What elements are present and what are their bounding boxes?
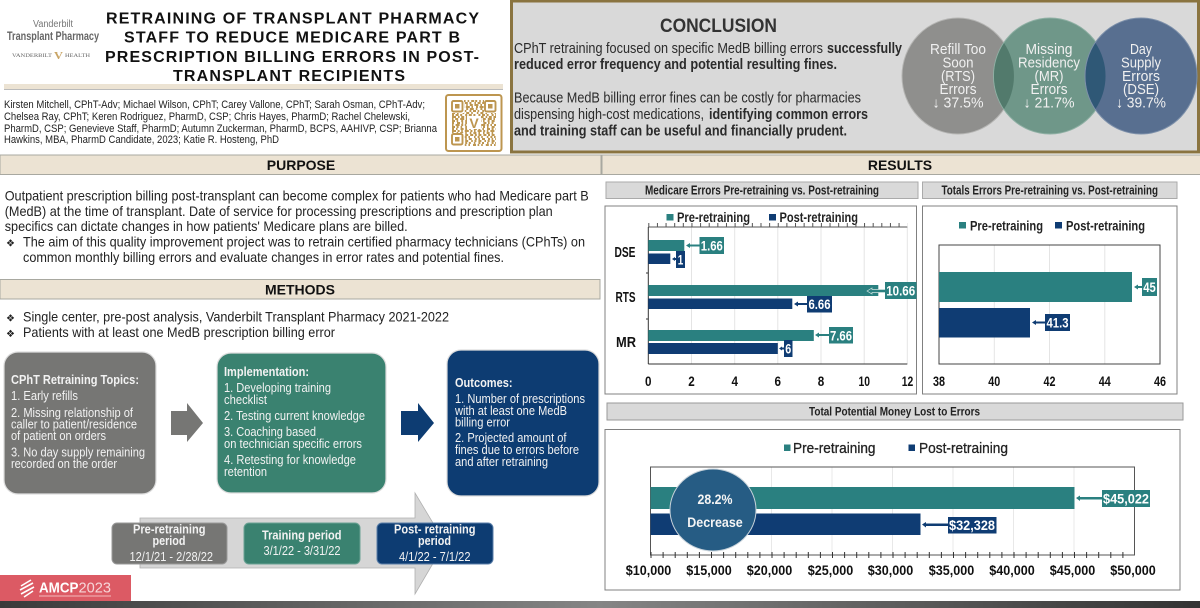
panel: outcomes: and after retraining bbox=[455, 455, 548, 469]
data labels: 1 bbox=[678, 252, 683, 268]
panel: CPhT retraining topics: 3. No day supply remaining bbox=[11, 446, 145, 460]
timeline: training period: Training period bbox=[262, 528, 342, 542]
panel: implementation: 4. Retesting for knowledge bbox=[224, 453, 356, 467]
panel: CPhT retraining topics bbox=[4, 352, 156, 494]
axis labels bbox=[933, 373, 1166, 389]
data labels: $45,022 bbox=[1103, 490, 1149, 506]
data labels bbox=[922, 490, 1150, 534]
authors: Chelsea Ray, CPhT; Keren Rodriguez, PharmD, CSP; Chris Hayes, PharmD; Rachel Chelewski, bbox=[4, 111, 410, 123]
axis labels: 10 bbox=[858, 373, 870, 389]
footer bar bbox=[0, 601, 1200, 608]
axis labels: $25,000 bbox=[808, 562, 853, 578]
authors: Kirsten Mitchell, CPhT-Adv; Michael Wilson, CPhT; Carey Vallone, CPhT; Sarah Osman, CPhT-Adv; bbox=[4, 99, 425, 111]
legend bbox=[666, 210, 858, 225]
logo: AMCP 2023: 2023 bbox=[78, 580, 111, 596]
arrow: timeline bbox=[140, 493, 445, 594]
text block: purpose: common monthly billing errors and evaluate changes in error rates and potential fines. bbox=[23, 249, 504, 265]
heading: methods: METHODS bbox=[265, 282, 335, 298]
category labels: DSE bbox=[614, 244, 636, 261]
panel: implementation bbox=[217, 353, 386, 493]
icon: QR code bbox=[446, 95, 502, 151]
icon: QR code: V bbox=[469, 115, 479, 131]
axis labels: $20,000 bbox=[747, 562, 792, 578]
text block: conclusion body: successfully bbox=[827, 41, 902, 57]
panel: outcomes bbox=[447, 350, 599, 496]
heading: results bbox=[602, 155, 1200, 174]
venn: error reductions: ↓ 37.5% bbox=[932, 96, 984, 112]
panel: conclusion bbox=[512, 1, 1198, 152]
timeline: post-retraining period bbox=[377, 522, 493, 564]
text block: conclusion body: and training staff can be useful and financially prudent. bbox=[514, 124, 847, 140]
heading: purpose bbox=[0, 155, 601, 174]
callout: 28.2% decrease bbox=[670, 469, 756, 551]
authors: Hawkins, MBA, PharmD Candidate, 2023; Katie R. Hosteng, PhD bbox=[4, 134, 279, 146]
logo: Vanderbilt Transplant Pharmacy: HEALTH bbox=[65, 53, 90, 59]
timeline: pre-retraining period: period bbox=[152, 534, 186, 548]
axis labels bbox=[626, 562, 1156, 578]
venn: error reductions: Missing bbox=[1026, 42, 1072, 58]
panel: outcomes: 2. Projected amount of bbox=[455, 431, 567, 445]
text block: purpose: specifics can dictate changes in how patients' Medicare plans are billed. bbox=[5, 218, 408, 234]
panel: CPhT retraining topics: caller to patient/residence bbox=[11, 418, 137, 432]
panel: implementation: on technician specific errors bbox=[224, 437, 362, 451]
venn: error reductions: Errors bbox=[940, 82, 976, 98]
text block: methods bullets: ❖ bbox=[6, 329, 15, 340]
timeline: training period: 3/1/22 - 3/31/22 bbox=[264, 544, 341, 558]
venn: error reductions: (MR) bbox=[1034, 69, 1064, 85]
text block: methods bullets: Single center, pre-post analysis, Vanderbilt Transplant Pharmacy 2021-2022 bbox=[23, 308, 449, 324]
axis labels: $10,000 bbox=[626, 562, 671, 578]
title: RETRAINING OF TRANSPLANT PHARMACY bbox=[106, 10, 479, 28]
heading: methods bbox=[0, 280, 600, 299]
text block: purpose: The aim of this quality improvement project was to retrain certified pharmacy technicians (CPhTs) on bbox=[23, 234, 585, 250]
venn: error reductions: Supply bbox=[1121, 56, 1162, 72]
panel: outcomes: with at least one MedB bbox=[454, 404, 567, 418]
bar chart: medicare errors bbox=[605, 206, 916, 394]
timeline: pre-retraining period: 12/1/21 - 2/28/22 bbox=[130, 550, 213, 564]
title bbox=[105, 10, 479, 85]
venn: error reductions: (DSE) bbox=[1123, 82, 1159, 98]
panel: CPhT retraining topics: 1. Early refills bbox=[11, 389, 78, 403]
panel: CPhT retraining topics: CPhT Retraining Topics: bbox=[11, 373, 139, 387]
text block: conclusion body: Because MedB billing error fines can be costly for pharmacies bbox=[514, 90, 861, 106]
data labels: 45 bbox=[1143, 279, 1156, 295]
axis labels: 40 bbox=[988, 373, 1000, 389]
logo: Vanderbilt Transplant Pharmacy bbox=[7, 19, 99, 62]
legend: Pre-retraining bbox=[677, 210, 750, 225]
bars bbox=[939, 272, 1132, 338]
title: TRANSPLANT RECIPIENTS bbox=[173, 68, 405, 85]
text block: methods bullets: Patients with at least one MedB prescription billing error bbox=[23, 324, 335, 340]
panel: implementation: checklist bbox=[224, 393, 267, 407]
bar chart: total errors bbox=[922, 206, 1177, 394]
axis labels: 38 bbox=[933, 373, 945, 389]
axis labels: 6 bbox=[775, 373, 781, 389]
data labels: 41.3 bbox=[1046, 314, 1069, 330]
text block: purpose: ❖ bbox=[6, 238, 15, 250]
authors: PharmD, CSP; Genevieve Staff, PharmD; Autumn Zuckerman, PharmD, BCPS, AAHIVP, CSP; Brianna bbox=[4, 123, 438, 135]
bars bbox=[648, 240, 878, 354]
bar chart: total potential money lost bbox=[605, 430, 1180, 590]
axis labels: 8 bbox=[818, 373, 824, 389]
legend: Post-retraining bbox=[1066, 218, 1145, 234]
legend: Pre-retraining bbox=[970, 218, 1043, 234]
data labels: 1.66 bbox=[701, 238, 723, 254]
heading: results: RESULTS bbox=[868, 157, 932, 173]
timeline: pre-retraining period bbox=[112, 522, 227, 564]
heading: money lost chart: Total Potential Money Lost to Errors bbox=[809, 404, 980, 418]
bars bbox=[650, 487, 1074, 535]
venn: error reductions: Day bbox=[1130, 42, 1153, 58]
text block: purpose bbox=[5, 188, 589, 265]
data labels bbox=[1032, 278, 1157, 331]
category labels: MR bbox=[616, 334, 636, 351]
axis labels: 2 bbox=[688, 373, 695, 389]
arrow: topics to implementation bbox=[171, 403, 203, 442]
text block: conclusion body bbox=[514, 41, 902, 140]
arrow: implementation to outcomes bbox=[401, 403, 434, 442]
legend bbox=[784, 440, 1008, 457]
venn: error reductions: ↓ 21.7% bbox=[1024, 96, 1075, 112]
venn: error reductions bbox=[902, 18, 1197, 134]
data labels bbox=[672, 237, 916, 357]
text block: conclusion body: dispensing high-cost medications, bbox=[514, 107, 704, 123]
venn: error reductions: Soon bbox=[942, 56, 974, 72]
venn: error reductions: Refill Too bbox=[930, 42, 986, 58]
data labels: 6 bbox=[785, 340, 791, 356]
callout: 28.2% decrease: 28.2% bbox=[698, 492, 732, 507]
venn: error reductions: Errors bbox=[1030, 82, 1068, 98]
legend: Post-retraining bbox=[780, 210, 858, 225]
heading: medicare errors chart: Medicare Errors Pre-retraining vs. Post-retraining bbox=[645, 184, 879, 198]
axis labels: $45,000 bbox=[1050, 562, 1095, 578]
logo: AMCP 2023: AMCP bbox=[39, 580, 78, 596]
panel: CPhT retraining topics: of patient on orders bbox=[11, 429, 106, 443]
panel: implementation: retention bbox=[224, 465, 267, 479]
timeline: pre-retraining period: Pre-retraining bbox=[133, 522, 206, 536]
logo: Vanderbilt Transplant Pharmacy: V bbox=[54, 51, 63, 62]
timeline: post-retraining period: Post- retraining bbox=[394, 522, 476, 536]
title: PRESCRIPTION BILLING ERRORS IN POST- bbox=[105, 49, 479, 66]
venn: error reductions: Residency bbox=[1018, 56, 1081, 72]
axis labels: $35,000 bbox=[929, 562, 974, 578]
data labels: $32,328 bbox=[949, 517, 995, 533]
legend: Post-retraining bbox=[919, 440, 1008, 457]
logo: AMCP 2023 bbox=[0, 575, 131, 601]
panel: CPhT retraining topics: 2. Missing relationship of bbox=[11, 406, 133, 420]
legend bbox=[959, 218, 1145, 234]
data labels: 10.66 bbox=[886, 282, 915, 298]
panel: CPhT retraining topics: recorded on the order bbox=[11, 457, 117, 471]
timeline: post-retraining period: 4/1/22 - 7/1/22 bbox=[399, 550, 471, 564]
panel: implementation: Implementation: bbox=[224, 365, 309, 379]
data labels: 6.66 bbox=[808, 296, 831, 312]
text block: purpose: Outpatient prescription billing post-transplant can become complex for patients who had Medicare part B bbox=[5, 188, 589, 204]
panel: outcomes: billing error bbox=[455, 416, 510, 430]
heading: conclusion: CONCLUSION bbox=[660, 15, 777, 37]
panel: outcomes: 1. Number of prescriptions bbox=[455, 392, 585, 406]
heading: purpose: PURPOSE bbox=[267, 157, 335, 173]
panel: implementation: 2. Testing current knowledge bbox=[224, 409, 365, 423]
axis labels: $50,000 bbox=[1110, 562, 1156, 578]
axis labels: 12 bbox=[902, 373, 913, 389]
axis labels: $40,000 bbox=[989, 562, 1035, 578]
panel: implementation: 1. Developing training bbox=[224, 381, 331, 395]
axis labels: 4 bbox=[731, 373, 738, 389]
legend: Pre-retraining bbox=[793, 440, 876, 457]
logo: Vanderbilt Transplant Pharmacy: Vanderbilt bbox=[33, 19, 73, 30]
timeline: post-retraining period: period bbox=[418, 534, 451, 548]
callout: 28.2% decrease: Decrease bbox=[687, 515, 743, 530]
text block: conclusion body: identifying common errors bbox=[709, 107, 868, 123]
venn: error reductions: ↓ 39.7% bbox=[1116, 96, 1166, 112]
axis labels: 44 bbox=[1099, 373, 1111, 389]
category labels: RTS bbox=[616, 289, 636, 306]
axis labels: 0 bbox=[645, 373, 652, 389]
text block: methods bullets bbox=[6, 308, 449, 340]
panel: outcomes: Outcomes: bbox=[455, 376, 512, 390]
panel: outcomes: fines due to errors before bbox=[455, 443, 579, 457]
text block: conclusion body: CPhT retraining focused on specific MedB billing errors bbox=[514, 41, 823, 57]
authors bbox=[4, 99, 438, 146]
data labels: 7.66 bbox=[830, 328, 852, 344]
logo: Vanderbilt Transplant Pharmacy: VANDERBILT bbox=[12, 53, 53, 59]
heading: money lost chart bbox=[607, 403, 1183, 420]
venn: error reductions: (RTS) bbox=[941, 69, 975, 85]
axis labels bbox=[645, 373, 913, 389]
venn: error reductions: Errors bbox=[1122, 69, 1160, 85]
title: STAFF TO REDUCE MEDICARE PART B bbox=[124, 30, 460, 46]
axis labels: 46 bbox=[1154, 373, 1166, 389]
text block: conclusion body: reduced error frequency and potential resulting fines. bbox=[514, 57, 837, 73]
axis labels: $30,000 bbox=[868, 562, 913, 578]
timeline: training period bbox=[244, 523, 360, 564]
axis labels: 42 bbox=[1044, 373, 1056, 389]
text block: purpose: (MedB) at the time of transplant. Date of service for processing prescriptions and prescription plan bbox=[5, 203, 553, 219]
panel: implementation: 3. Coaching based bbox=[224, 425, 316, 439]
logo: Vanderbilt Transplant Pharmacy: Transplant Pharmacy bbox=[7, 31, 99, 43]
text block: methods bullets: ❖ bbox=[6, 314, 15, 324]
axis labels: $15,000 bbox=[686, 562, 732, 578]
category labels bbox=[614, 244, 636, 351]
